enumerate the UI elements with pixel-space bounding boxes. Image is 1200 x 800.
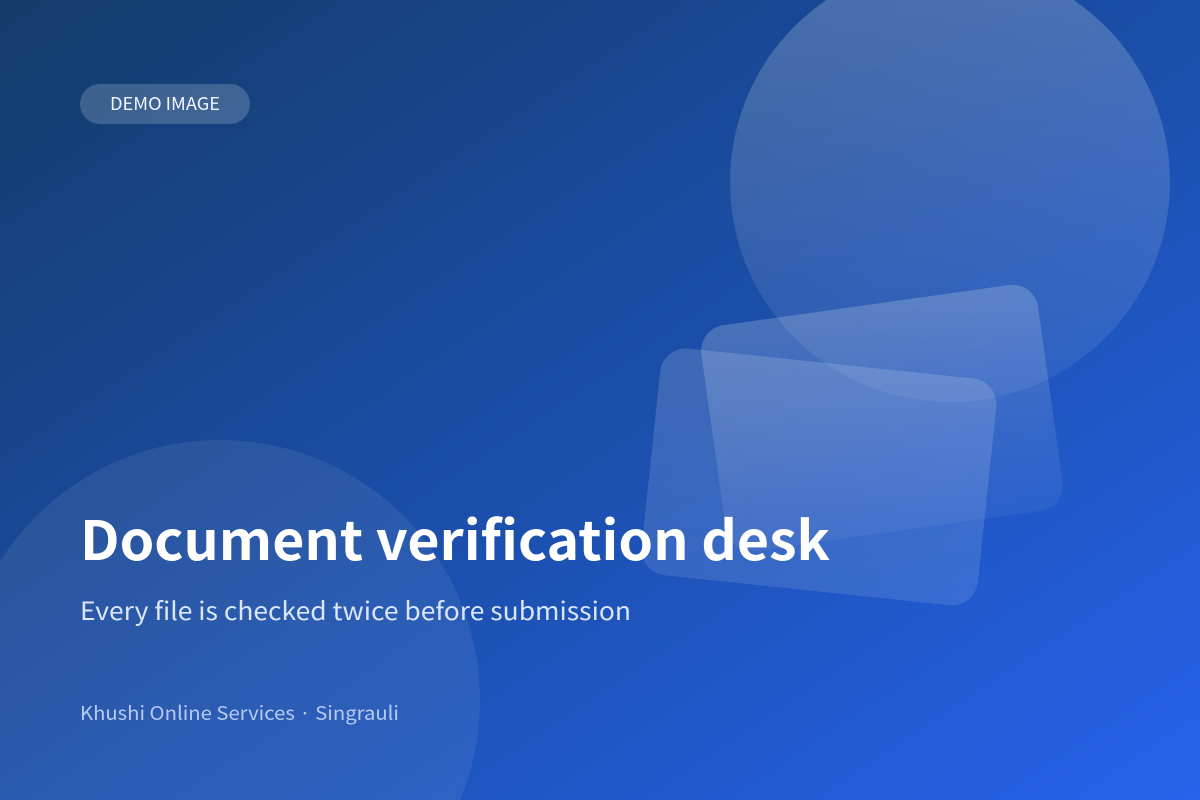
badge label: DEMO IMAGE <box>110 90 220 116</box>
footer: organisation and location: Khushi Online Services · Singrauli <box>80 699 399 726</box>
document card: back <box>698 281 1066 555</box>
document card: front <box>639 346 999 608</box>
decorative circle: top right <box>730 0 1170 402</box>
decorative circle: bottom left <box>0 440 480 800</box>
badge: demo image <box>80 84 250 124</box>
badge pill <box>80 84 250 124</box>
subtitle: Every file is checked twice before submission <box>80 592 631 628</box>
title: Document verification desk <box>80 497 830 576</box>
